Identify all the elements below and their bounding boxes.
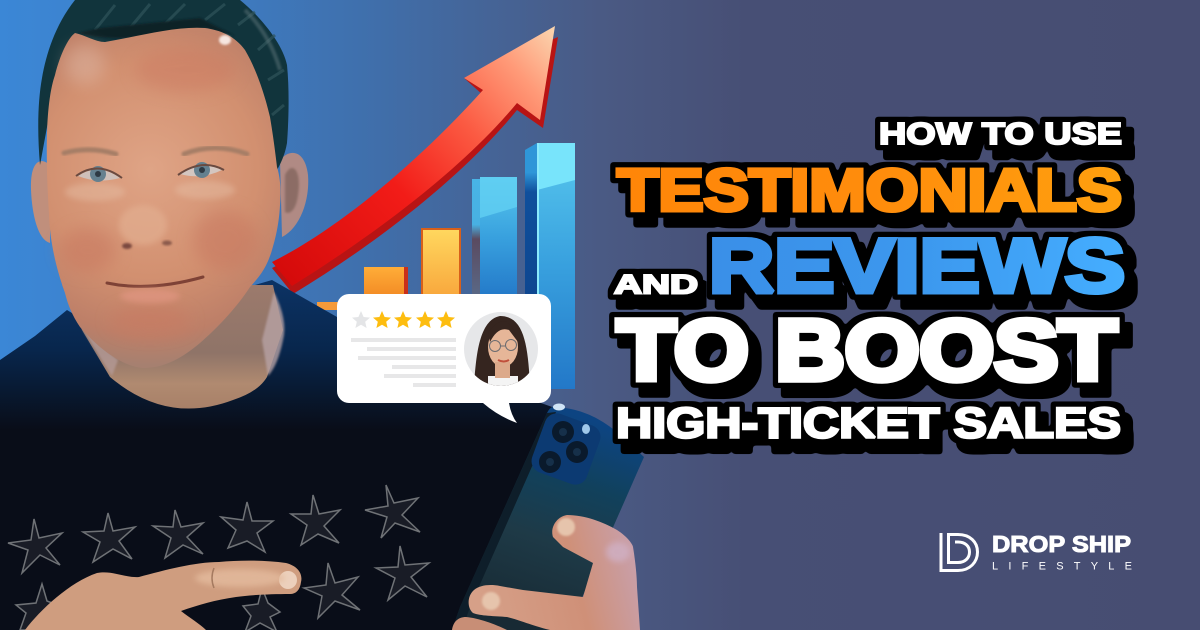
- shirt with star print: [0, 280, 555, 630]
- review text lines: [351, 338, 456, 387]
- cheeks: [60, 210, 257, 334]
- mouth: [107, 277, 203, 303]
- wordmark: lifestyle: LIFESTYLE: [992, 560, 1132, 572]
- callout: review speech bubble: [337, 294, 551, 423]
- heading: and: AND: [614, 270, 698, 300]
- right hand holding phone: [452, 515, 640, 630]
- bar: medium orange: [421, 228, 461, 298]
- nose: [119, 205, 172, 249]
- face: [47, 28, 281, 368]
- bar: tall blue: [525, 143, 575, 389]
- wordmark: drop ship: DROP SHIP: [992, 531, 1131, 557]
- avatar: reviewer portrait: [464, 312, 538, 386]
- heading: reviews: REVIEWS: [709, 224, 1125, 309]
- heading: high-ticket sales: HIGH-TICKET SALES: [616, 400, 1121, 448]
- left ear: [31, 161, 50, 243]
- logo: Drop Ship Lifestyle: [941, 531, 1132, 572]
- star rating: [352, 311, 455, 328]
- bar: medium blue: [472, 177, 517, 299]
- heading: how to use: HOW TO USE: [879, 116, 1122, 151]
- icon: D monogram: [941, 533, 978, 570]
- person: presenter: [0, 0, 555, 630]
- bar: small orange: [364, 267, 408, 297]
- star print: [8, 485, 429, 630]
- eye sockets: [65, 181, 235, 201]
- forehead warm patch: [135, 48, 235, 92]
- heading: testimonials: TESTIMONIALS: [617, 158, 1122, 224]
- pointing hand: [25, 561, 301, 630]
- eyebrows: [64, 148, 247, 154]
- right eye: [178, 162, 224, 178]
- right ear: [280, 153, 308, 237]
- camera bump: [528, 410, 604, 488]
- phone: [452, 404, 644, 630]
- neck: [62, 285, 284, 409]
- heading: to boost: TO BOOST: [617, 304, 1117, 398]
- icon: rising red arrow: [272, 26, 558, 294]
- forehead highlight: [219, 35, 231, 45]
- hair: [38, 0, 289, 170]
- bar chart: [317, 143, 575, 389]
- bar: base stub: [317, 302, 339, 310]
- left eye: [76, 166, 122, 182]
- title: [614, 116, 1125, 448]
- forehead pale left: [65, 45, 105, 85]
